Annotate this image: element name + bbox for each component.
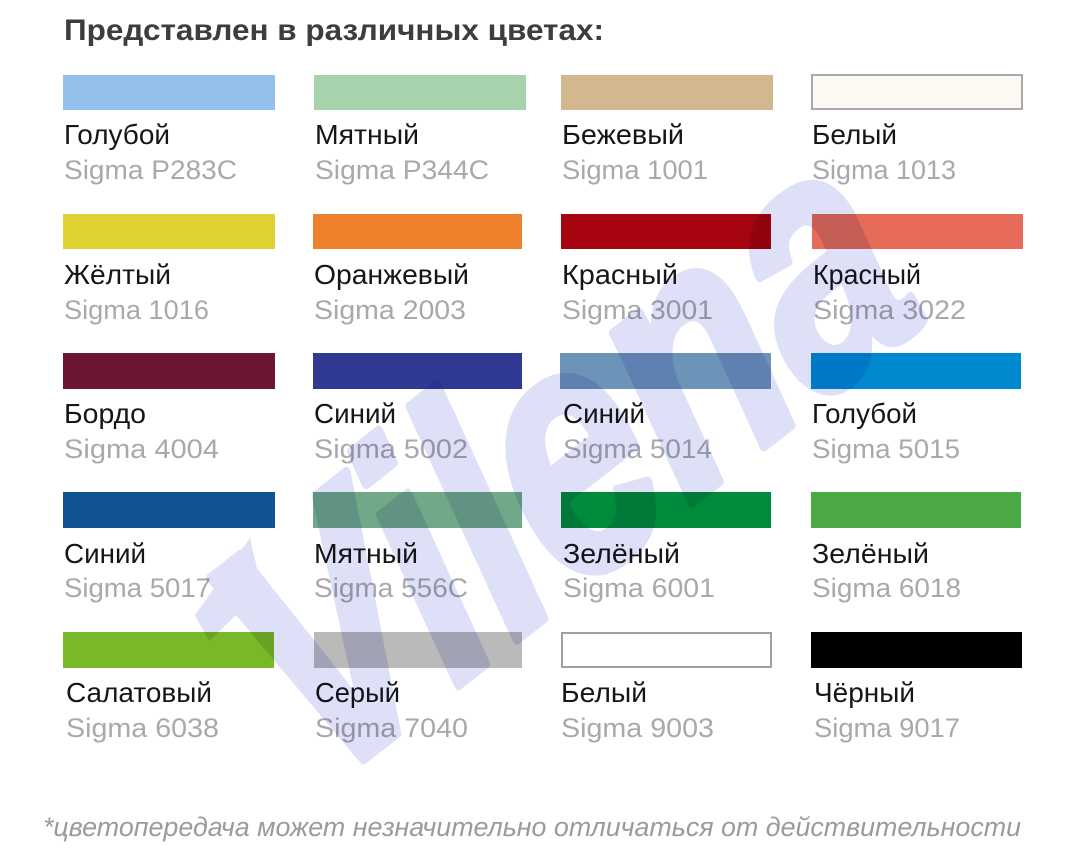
colour: Серый 7040: Sigma 7040 <box>315 713 468 743</box>
colour: Белый 1013: Белый <box>812 119 897 150</box>
colour: Салатовый 6038: Салатовый <box>66 677 212 708</box>
colour: Голубой 5015: Голубой <box>812 398 917 429</box>
footnote: *цветопередача может незначительно отличаться от действительности <box>43 812 1021 842</box>
colour: Белый 9003: Белый <box>561 677 647 708</box>
colour: Белый 9003: Sigma 9003 <box>561 713 714 743</box>
colour: Белый 1013: Sigma 1013 <box>812 155 956 185</box>
colour: Оранжевый 2003: Оранжевый <box>314 259 469 290</box>
colour: Бежевый 1001: Бежевый <box>562 119 684 150</box>
colour: Синий 5014: Синий <box>563 398 645 429</box>
colour: Мятный P344C: Мятный <box>315 119 419 150</box>
colour: Салатовый 6038: Sigma 6038 <box>66 713 219 743</box>
colour: Бежевый 1001 <box>561 75 773 185</box>
colour: Зелёный 6018: Зелёный <box>812 538 929 569</box>
colour: Жёлтый 1016 <box>63 214 275 325</box>
colour: Оранжевый 2003 <box>313 214 522 325</box>
colour: Жёлтый 1016: Sigma 1016 <box>64 295 209 325</box>
colour: Голубой 5015 <box>811 353 1021 464</box>
colour: Синий 5002: Sigma 5002 <box>314 434 468 464</box>
colour: Жёлтый 1016: Жёлтый <box>64 259 171 290</box>
colour: Синий 5017: Sigma 5017 <box>64 573 211 603</box>
colour: Синий 5014: Sigma 5014 <box>563 434 712 464</box>
colour: Бордо 4004: Sigma 4004 <box>64 434 219 464</box>
colour: Мятный 556C: Sigma 556C <box>314 573 468 603</box>
colour: Белый 1013 <box>812 75 1022 185</box>
colour: Красный 3022: Красный <box>813 259 921 290</box>
colour: Красный 3022: Sigma 3022 <box>813 295 966 325</box>
colour: Мятный 556C: Мятный <box>314 538 418 569</box>
colour: Зелёный 6001: Зелёный <box>563 538 680 569</box>
colour: Синий 5014 <box>560 353 771 464</box>
colour: Голубой P283C: Голубой <box>64 119 170 150</box>
colour: Зелёный 6001 <box>561 492 771 603</box>
colour: Салатовый 6038 <box>63 632 274 743</box>
colour: Белый 9003 <box>561 633 771 743</box>
colour: Красный 3001 <box>561 214 771 325</box>
colour: Мятный P344C: Sigma P344C <box>315 155 489 185</box>
colour: Бордо 4004 <box>63 353 275 464</box>
colour: Зелёный 6001: Sigma 6001 <box>563 573 715 603</box>
colour: Красный 3001: Sigma 3001 <box>562 295 713 325</box>
colour: Красный 3022 <box>812 214 1023 325</box>
colour: Синий 5002: Синий <box>314 398 396 429</box>
title: Представлен в различных цветах: <box>64 14 604 47</box>
colour: Бордо 4004: Бордо <box>64 398 146 429</box>
colour: Бежевый 1001: Sigma 1001 <box>562 155 708 185</box>
colour: Голубой P283C: Sigma P283C <box>64 155 237 185</box>
colour: Оранжевый 2003: Sigma 2003 <box>314 295 466 325</box>
colour: Голубой P283C <box>63 75 275 185</box>
colour: Синий 5017 <box>63 492 275 603</box>
colour: Синий 5017: Синий <box>64 538 146 569</box>
colour: Зелёный 6018: Sigma 6018 <box>812 573 961 603</box>
colour: Голубой 5015: Sigma 5015 <box>812 434 960 464</box>
colour: Зелёный 6018 <box>811 492 1021 603</box>
colour: Чёрный 9017 <box>811 632 1022 743</box>
colour: Серый 7040: Серый <box>315 677 400 708</box>
colour: Мятный 556C <box>313 492 522 603</box>
colour: Чёрный 9017: Чёрный <box>814 677 915 708</box>
colour: Синий 5002 <box>313 353 522 464</box>
colour: Красный 3001: Красный <box>562 259 678 290</box>
colour: Мятный P344C <box>314 75 526 185</box>
colour: Чёрный 9017: Sigma 9017 <box>814 713 960 743</box>
colour: Серый 7040 <box>314 632 522 743</box>
